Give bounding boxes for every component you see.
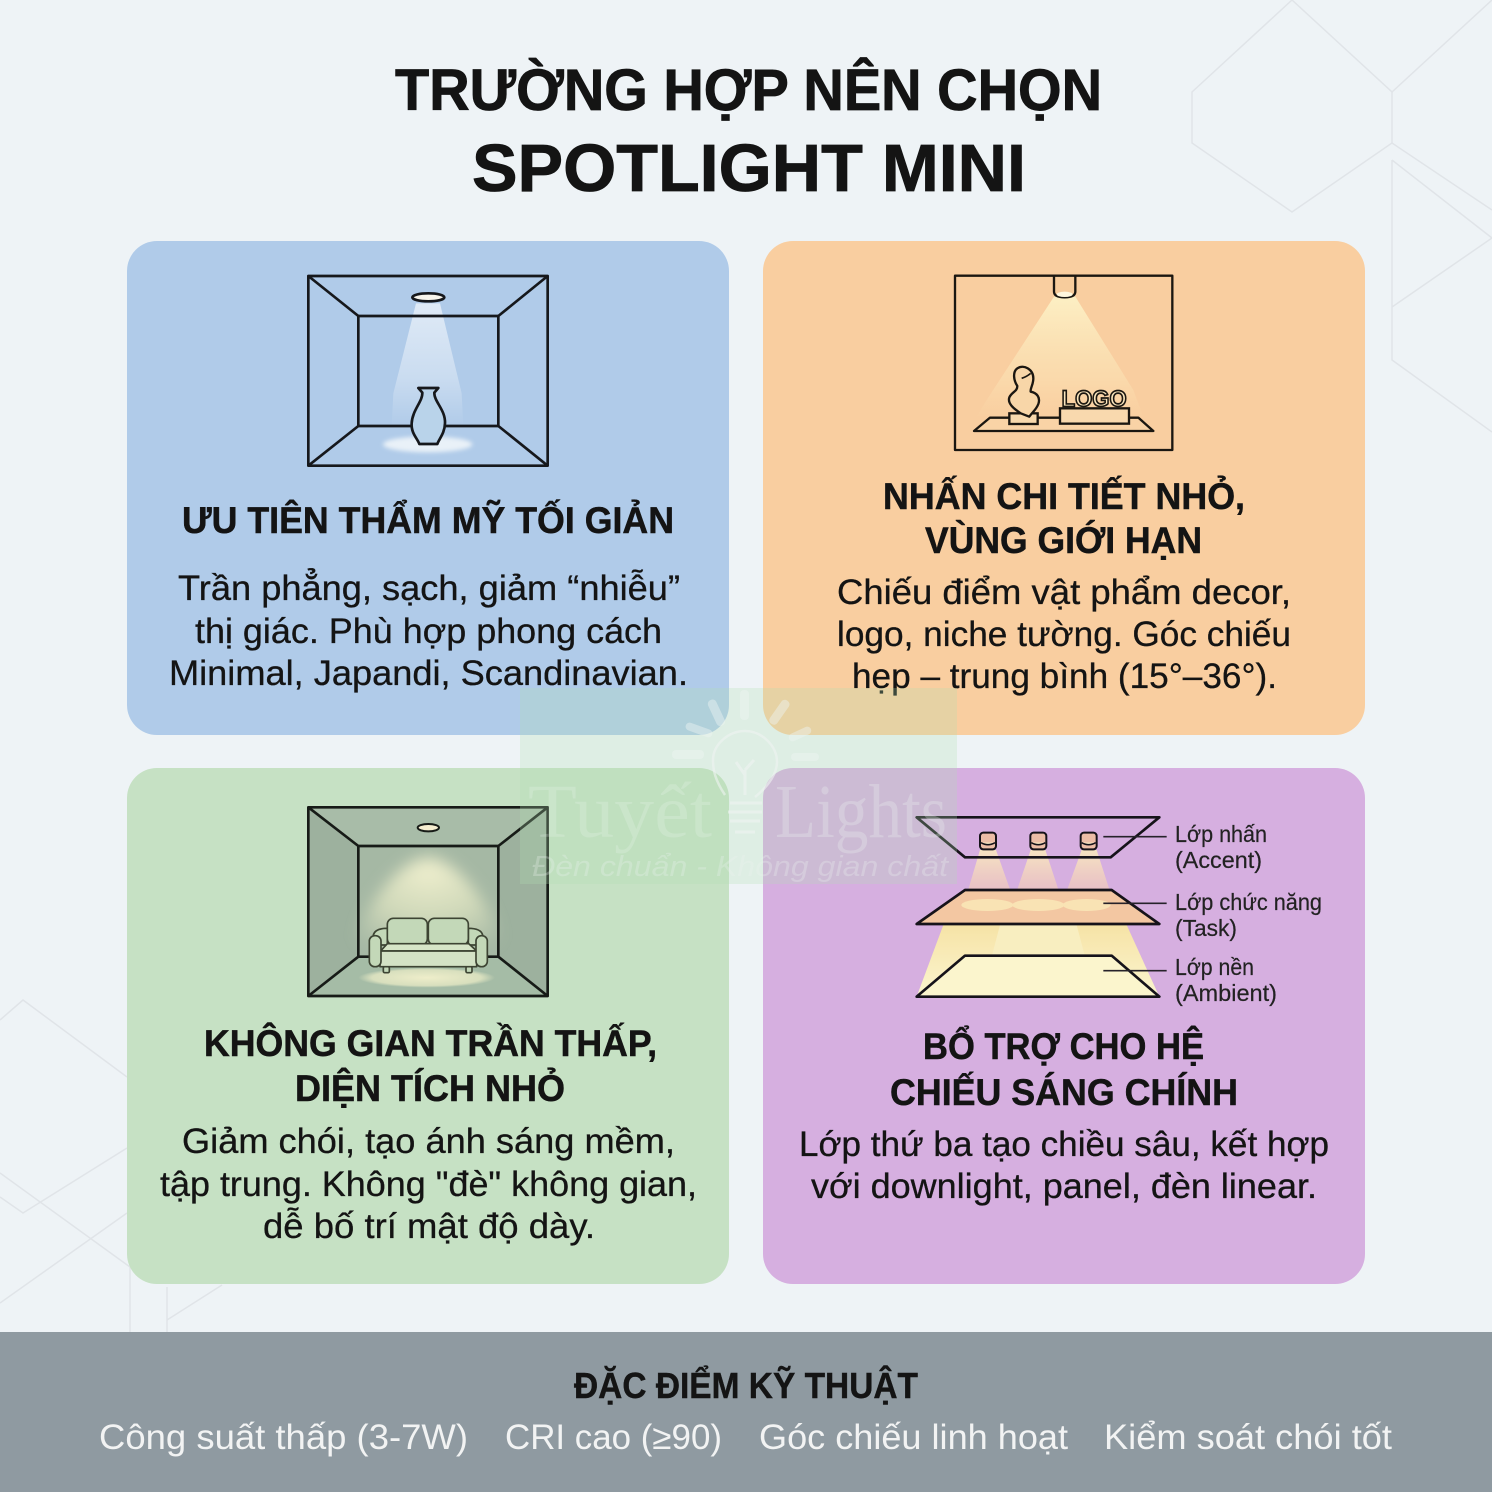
label: accent layer: Lớp nhấn	[1175, 821, 1267, 847]
body text	[160, 1122, 697, 1246]
body text: logo, niche tường. Góc chiếu	[837, 615, 1291, 654]
body text: tập trung. Không "đè" không gian,	[160, 1165, 697, 1204]
icon: room with vase	[308, 276, 548, 466]
body text: dễ bố trí mật độ dày.	[263, 1207, 595, 1246]
title: TRƯỜNG HỢP NÊN CHỌN	[395, 58, 1102, 123]
label: accent layer: (Accent)	[1175, 847, 1262, 873]
body text: thị giác. Phù hợp phong cách	[195, 612, 662, 651]
body text: Giảm chói, tạo ánh sáng mềm,	[182, 1122, 675, 1161]
label: task layer: (Task)	[1175, 915, 1237, 941]
heading	[204, 1022, 657, 1109]
body text	[169, 568, 688, 693]
icon: three lighting layers diagram	[917, 817, 1167, 997]
body text: Lớp thứ ba tạo chiều sâu, kết hợp	[799, 1125, 1329, 1164]
label: ambient layer	[1175, 954, 1277, 1006]
body text: Chiếu điểm vật phẩm decor,	[837, 573, 1291, 612]
heading	[890, 1024, 1238, 1113]
heading: BỔ TRỢ CHO HỆ	[923, 1024, 1204, 1067]
heading: NHẤN CHI TIẾT NHỎ,	[883, 475, 1245, 517]
body text: Trần phẳng, sạch, giảm “nhiễu”	[178, 568, 680, 608]
heading: CHIẾU SÁNG CHÍNH	[890, 1072, 1238, 1113]
body text	[837, 573, 1291, 696]
label: task layer	[1175, 889, 1322, 941]
footer: technical features	[0, 1332, 1492, 1492]
spec: glare control: Kiểm soát chói tốt	[1104, 1418, 1392, 1457]
watermark: Đèn chuẩn - Không gian chất	[532, 851, 950, 883]
label: accent layer	[1175, 821, 1267, 873]
label: task layer: Lớp chức năng	[1175, 889, 1322, 915]
heading	[883, 475, 1245, 561]
watermark: Tuyết	[528, 770, 712, 854]
body text: hẹp – trung bình (15°–36°).	[852, 657, 1277, 696]
spec: high CRI: CRI cao (≥90)	[505, 1418, 722, 1457]
spec: low power: Công suất thấp (3-7W)	[99, 1418, 468, 1457]
watermark: Lights	[775, 770, 947, 854]
panel: low ceiling	[127, 768, 729, 1284]
panel: small details	[763, 241, 1365, 735]
title: SPOTLIGHT MINI	[472, 131, 1026, 206]
icon: accent light on decor and logo: LOGO	[1062, 386, 1127, 412]
body text: với downlight, panel, đèn linear.	[811, 1167, 1317, 1206]
heading: ƯU TIÊN THẨM MỸ TỐI GIẢN	[182, 499, 674, 541]
body text	[799, 1125, 1329, 1206]
watermark	[520, 688, 957, 884]
panel: aesthetic minimal	[127, 241, 729, 735]
heading: KHÔNG GIAN TRẦN THẤP,	[204, 1022, 657, 1064]
spec: flexible beam angle: Góc chiếu linh hoạt	[759, 1418, 1068, 1457]
body text: Minimal, Japandi, Scandinavian.	[169, 654, 688, 693]
title	[395, 58, 1102, 206]
heading: DIỆN TÍCH NHỎ	[295, 1067, 565, 1109]
footer heading: ĐẶC ĐIỂM KỸ THUẬT	[574, 1364, 918, 1406]
icon: room with sofa	[308, 807, 548, 996]
label: ambient layer: Lớp nền	[1175, 954, 1254, 980]
heading: VÙNG GIỚI HẠN	[925, 519, 1202, 561]
icon: accent light on decor and logo	[955, 276, 1172, 450]
label: ambient layer: (Ambient)	[1175, 980, 1277, 1006]
panel: supporting main lighting	[763, 768, 1365, 1284]
